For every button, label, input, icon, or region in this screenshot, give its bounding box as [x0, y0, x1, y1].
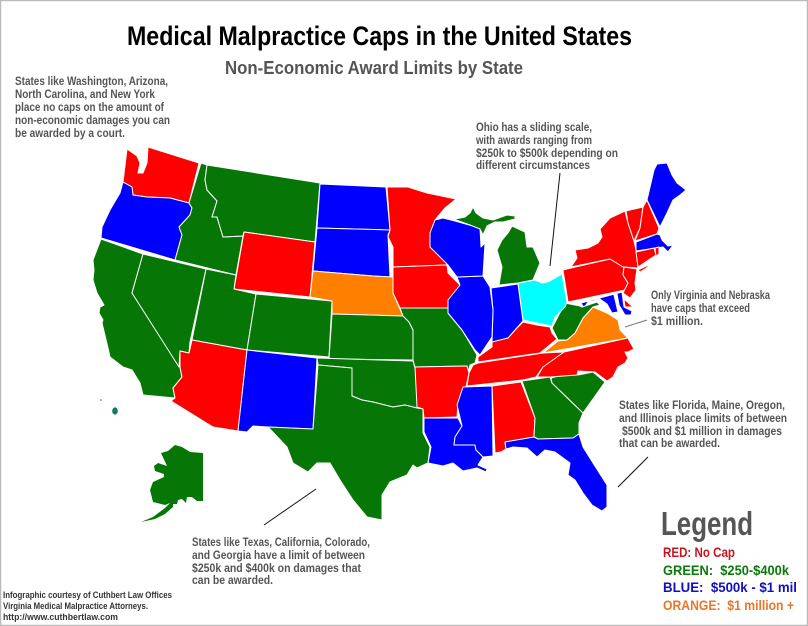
state: South Dakota [313, 228, 390, 277]
state: Indiana [491, 284, 523, 342]
state: Alaska [141, 445, 203, 522]
state: Wisconsin [430, 218, 485, 277]
state: Long Island [638, 263, 652, 272]
state: Hawaii [100, 399, 118, 415]
text block: no caps note [15, 74, 170, 140]
state: Wyoming [234, 232, 315, 297]
text block: Virginia and Nebraska note: $1 million. [651, 314, 703, 328]
text block: Virginia and Nebraska note: Only Virginia and Nebraska [651, 288, 770, 302]
legend item: blue: BLUE: $500k - $1 mil [663, 579, 797, 595]
state: Oregon [101, 182, 192, 260]
legend item: red: RED: No Cap [663, 544, 735, 560]
state: North Carolina [537, 338, 634, 381]
title: Medical Malpractice Caps in the United States [127, 21, 632, 51]
text block: Virginia and Nebraska note [651, 288, 770, 328]
text block: Texas note: States like Texas, California, Colorado, [192, 535, 370, 549]
state: New Hampshire [635, 200, 659, 241]
arrow: Ohio leader line [550, 173, 560, 266]
text block: Ohio note: $250k to $500k depending on [476, 146, 618, 160]
text block: Florida note: that can be awarded. [619, 436, 720, 450]
text block: Florida note [619, 398, 787, 450]
state: Colorado [247, 294, 332, 357]
arrow: Virginia leader line [625, 320, 647, 327]
state: Pennsylvania [563, 259, 628, 302]
state: Maryland [581, 292, 632, 315]
text block: Ohio note: Ohio has a sliding scale, [476, 120, 592, 134]
credit: http://www.cuthbertlaw.com [3, 612, 118, 623]
text block: no caps note: North Carolina, and New York [15, 87, 155, 101]
legend item: green: GREEN: $250-$400k [663, 562, 789, 578]
state: Idaho [175, 163, 243, 275]
state: Montana [205, 165, 320, 242]
credit: Virginia Medical Malpractice Attorneys. [3, 601, 148, 612]
state: West Virginia [552, 302, 600, 340]
state: Missouri [400, 308, 477, 373]
state: Arkansas [415, 366, 469, 418]
text block: no caps note: be awarded by a court. [15, 126, 125, 140]
state: Nebraska [310, 271, 403, 316]
state: Vermont [626, 207, 643, 241]
state: Nevada [132, 254, 206, 367]
state: Iowa [393, 265, 460, 308]
state: Rhode Island [655, 247, 659, 256]
state: North Dakota [317, 184, 390, 230]
state: New Mexico [238, 350, 317, 432]
state: Michigan lower peninsula [497, 226, 540, 285]
state: Mississippi [454, 386, 493, 457]
arrow: Texas leader line [264, 489, 316, 525]
text block: Texas note: $250k and $400k on damages that [192, 561, 361, 575]
credit [3, 590, 172, 623]
state: South Carolina [551, 371, 605, 413]
state: Tennessee [467, 352, 564, 386]
state: Ohio [518, 274, 567, 326]
state: Louisiana [424, 418, 487, 472]
subtitle: Non-Economic Award Limits by State [225, 58, 523, 78]
state: Alabama [492, 382, 535, 453]
state: Georgia [522, 377, 583, 439]
arrow: Florida leader line [618, 457, 648, 487]
state: New Jersey [623, 267, 637, 298]
text block: no caps note: non-economic damages you can [15, 113, 170, 127]
state: Kansas [329, 314, 413, 360]
state: Washington [123, 147, 199, 203]
text block: Ohio note [475, 120, 618, 172]
text block: Ohio note: different circumstances [476, 158, 590, 172]
text block: Florida note: $500k and $1 million in damages [622, 424, 782, 438]
state: California [93, 239, 182, 398]
state: Illinois [448, 276, 493, 355]
state: Delaware [624, 299, 633, 307]
state: Minnesota [387, 187, 456, 267]
map of the United States [93, 147, 686, 522]
state: Kentucky [478, 322, 557, 362]
state: Florida [505, 434, 607, 511]
state: Virginia [543, 307, 628, 353]
state: Oklahoma [317, 358, 423, 409]
text block: Texas note: can be awarded. [192, 573, 273, 587]
text block: Texas note [192, 535, 370, 587]
state: Arizona [171, 340, 247, 431]
state: Michigan upper peninsula [455, 207, 515, 235]
credit: Infographic courtesy of Cuthbert Law Offices [3, 590, 172, 601]
state: New York [571, 211, 638, 268]
text block: no caps note: place no caps on the amount of [15, 100, 165, 114]
state: Maine [647, 163, 686, 227]
state: Massachusetts [636, 234, 673, 252]
legend [661, 505, 797, 613]
text block: Texas note: and Georgia have a limit of between [192, 548, 365, 562]
text block: no caps note: States like Washington, Arizona, [15, 74, 168, 88]
state: Connecticut [636, 248, 656, 267]
text block: Virginia and Nebraska note: have caps that exceed [651, 301, 750, 315]
text block: Ohio note: with awards ranging from [475, 133, 592, 147]
state: Utah [192, 269, 256, 350]
state: Texas [268, 365, 430, 520]
legend heading: Legend [661, 505, 753, 542]
